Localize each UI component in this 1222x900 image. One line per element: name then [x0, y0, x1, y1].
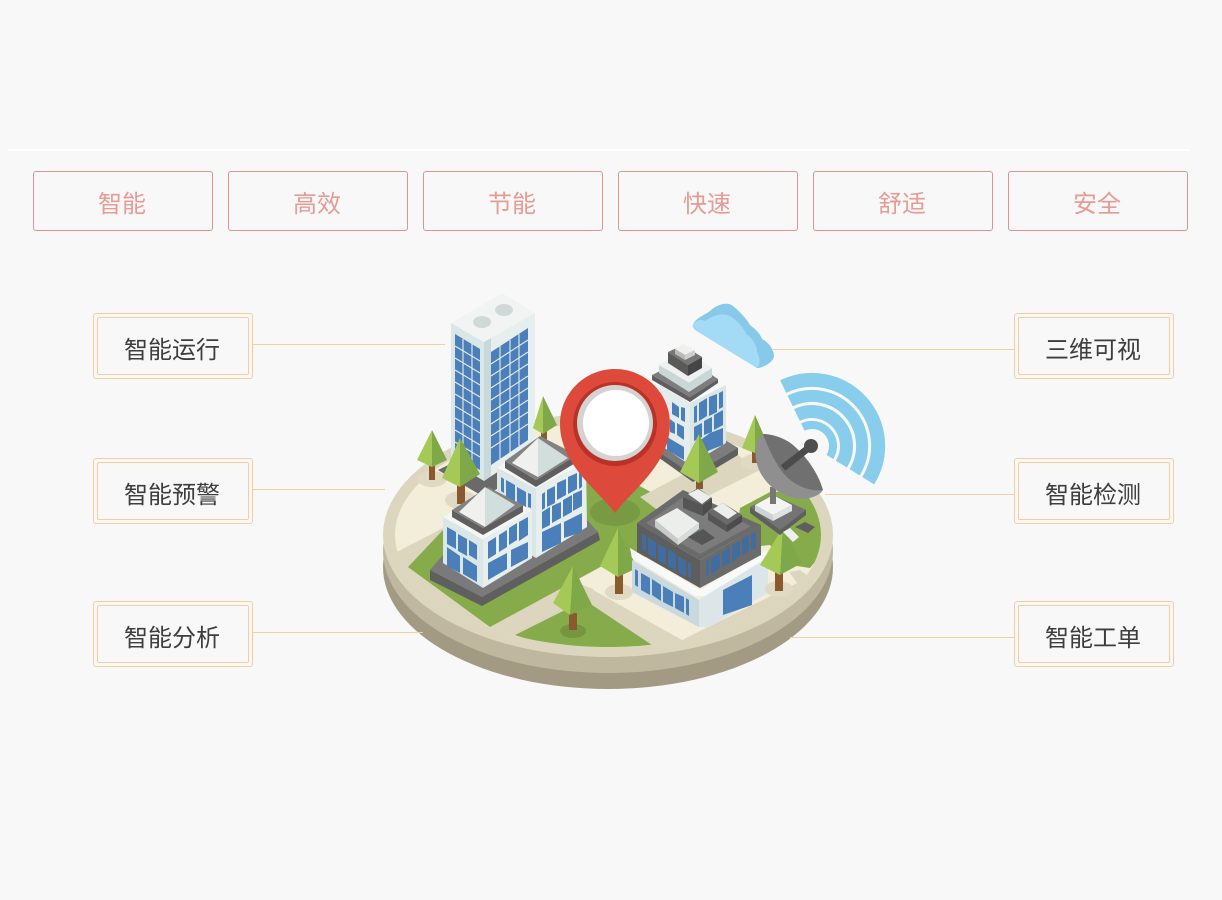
label: 智能检测 — [1014, 458, 1174, 524]
tree: centre — [600, 528, 637, 600]
cloud — [693, 304, 774, 368]
tag: 节能 — [423, 171, 603, 231]
tag: 快速: 快速 — [683, 191, 731, 218]
label: 智能工单: 智能工单 — [1045, 625, 1141, 652]
label: 智能检测: 智能检测 — [1045, 482, 1141, 509]
label: 三维可视 — [1014, 313, 1174, 379]
label: 三维可视: 三维可视 — [1045, 337, 1141, 364]
isometric city illustration — [383, 304, 886, 689]
satellite dish — [750, 434, 823, 542]
tag: 节能: 节能 — [488, 191, 536, 218]
label: 智能分析 — [93, 601, 253, 667]
tag: 舒适: 舒适 — [878, 191, 926, 218]
tree: beside tower — [533, 396, 557, 441]
label: 智能预警 — [93, 458, 253, 524]
label: 智能预警: 智能预警 — [124, 482, 220, 509]
tree: tall left — [442, 438, 480, 509]
tree: right — [760, 527, 802, 597]
tag: 智能 — [33, 171, 213, 231]
centre-left pair of buildings — [430, 436, 600, 606]
main low building — [630, 488, 768, 627]
wifi signal arcs — [783, 380, 878, 481]
tag: 安全 — [1008, 171, 1188, 231]
tree: in front of rear building — [680, 434, 718, 489]
tag: 快速 — [618, 171, 798, 231]
platform disc — [383, 413, 840, 689]
label: 智能运行 — [93, 313, 253, 379]
tree: front — [553, 566, 592, 638]
tower building — [438, 293, 540, 497]
tree: rear right — [741, 415, 769, 470]
tag: 智能: 智能 — [98, 191, 146, 218]
tree: left back — [417, 430, 447, 487]
tag: 安全: 安全 — [1073, 191, 1121, 218]
tag: 高效: 高效 — [293, 191, 341, 218]
label: 智能运行: 智能运行 — [124, 337, 220, 364]
label: 智能工单 — [1014, 601, 1174, 667]
tag: 高效 — [228, 171, 408, 231]
label: 智能分析: 智能分析 — [124, 625, 220, 652]
rear right building — [648, 344, 738, 482]
tag: 舒适 — [813, 171, 993, 231]
location pin — [560, 369, 670, 526]
